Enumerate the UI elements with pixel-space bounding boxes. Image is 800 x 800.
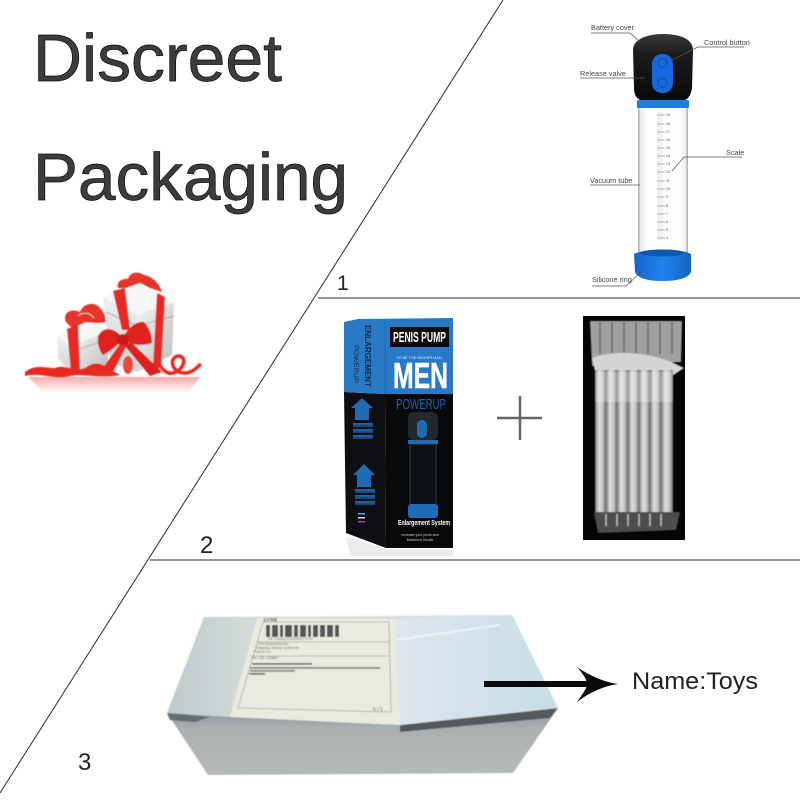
label: Name:Toys: Name:Toys xyxy=(632,668,758,695)
pump head xyxy=(633,34,693,100)
title: Discreet Packaging xyxy=(33,21,348,215)
box reflection xyxy=(346,537,453,556)
vacuum tube: 13 xyxy=(666,162,670,166)
bow xyxy=(98,322,162,376)
vacuum tube xyxy=(638,106,688,253)
vacuum tube: 10 xyxy=(666,187,670,191)
number 2: 2 xyxy=(200,532,213,559)
parcel side xyxy=(167,708,558,775)
lower bag end xyxy=(594,512,680,533)
side blue arrows xyxy=(351,398,375,522)
shipping label: 5 / 5 xyxy=(373,707,383,713)
silicone ring xyxy=(634,250,691,281)
callouts: Battery cover xyxy=(591,23,635,32)
callouts: Silicone ring xyxy=(592,275,632,284)
callouts: Control button xyxy=(704,38,750,47)
vacuum tube: 12 xyxy=(666,170,670,174)
icon: plus sign xyxy=(497,396,542,440)
vacuum tube: 14 xyxy=(666,154,670,158)
callouts: Vacuum tube xyxy=(590,176,632,185)
vacuum tube: 11 xyxy=(666,179,670,183)
vacuum tube: 5 xyxy=(666,228,668,232)
parcel top xyxy=(167,615,558,725)
callouts xyxy=(580,23,750,286)
control buttons xyxy=(652,54,673,93)
callouts: Scale xyxy=(726,148,744,157)
side vertical text: ENLARGEMENT xyxy=(363,325,373,388)
shipping label: 发货单据 xyxy=(263,617,277,622)
box pump image xyxy=(408,412,438,518)
upper bag folds xyxy=(590,321,682,366)
blue top band xyxy=(344,318,453,394)
product diagram: pump with callouts xyxy=(580,23,750,286)
callouts: Release valve xyxy=(580,69,626,78)
box front panel xyxy=(385,394,453,548)
product retail box xyxy=(344,318,453,556)
vacuum tube: 19 xyxy=(666,113,670,117)
Enlargement System: Enlargement System xyxy=(398,520,450,527)
curling ribbon xyxy=(25,356,201,377)
vacuum tube: 4 xyxy=(666,236,668,240)
side vertical text xyxy=(352,325,373,388)
PENIS PUMP label xyxy=(390,327,449,347)
PENIS PUMP label: PENIS PUMP xyxy=(393,329,446,346)
large gift box xyxy=(103,273,174,372)
product retail box: Increase your penis size xyxy=(401,533,439,537)
box side panel xyxy=(344,392,386,548)
shipping label: HK Catalog 01225000 FH 04 xyxy=(268,637,313,641)
title: Discreet Packaging: Packaging xyxy=(33,140,348,215)
air columns xyxy=(595,370,673,518)
vacuum tube: 17 xyxy=(666,130,670,134)
product retail box: Maximum results xyxy=(407,538,433,542)
shipping label: Post to: Fu xyxy=(254,650,271,654)
vacuum tube: 9 xyxy=(666,195,668,199)
product retail box: TO BE THE BIGGER MAN xyxy=(396,356,442,360)
blue collar xyxy=(637,100,689,108)
shipping parcel xyxy=(167,615,558,775)
barcode xyxy=(266,625,339,637)
arrow to name xyxy=(484,667,618,702)
vacuum tube: 18 xyxy=(666,122,670,126)
small gift box xyxy=(57,304,108,375)
shipping label: Shipping: Airship Jumbo Kit xyxy=(256,646,299,650)
vacuum tube: 15 xyxy=(666,146,670,150)
reflection xyxy=(28,377,200,393)
vacuum tube: 8 xyxy=(666,204,668,208)
title: Discreet Packaging: Discreet xyxy=(33,21,282,96)
MEN: MEN xyxy=(393,355,448,396)
icon: red ribbon gift boxes xyxy=(25,273,201,393)
POWERUP: POWERUP xyxy=(396,396,446,413)
shipping label xyxy=(230,617,400,725)
side vertical text: POWERUP xyxy=(352,345,359,383)
shipping label: The Economies Inc xyxy=(258,642,288,646)
vacuum tube: 16 xyxy=(666,138,670,142)
dark crease on right xyxy=(400,708,558,732)
vacuum tube: 6 xyxy=(666,220,668,224)
number 3: 3 xyxy=(78,749,91,776)
vacuum tube: 7 xyxy=(666,212,668,216)
number 1: 1 xyxy=(337,272,349,295)
shipping label: Tel: 130 1234567 xyxy=(252,656,279,660)
air column bag on black xyxy=(583,316,685,540)
